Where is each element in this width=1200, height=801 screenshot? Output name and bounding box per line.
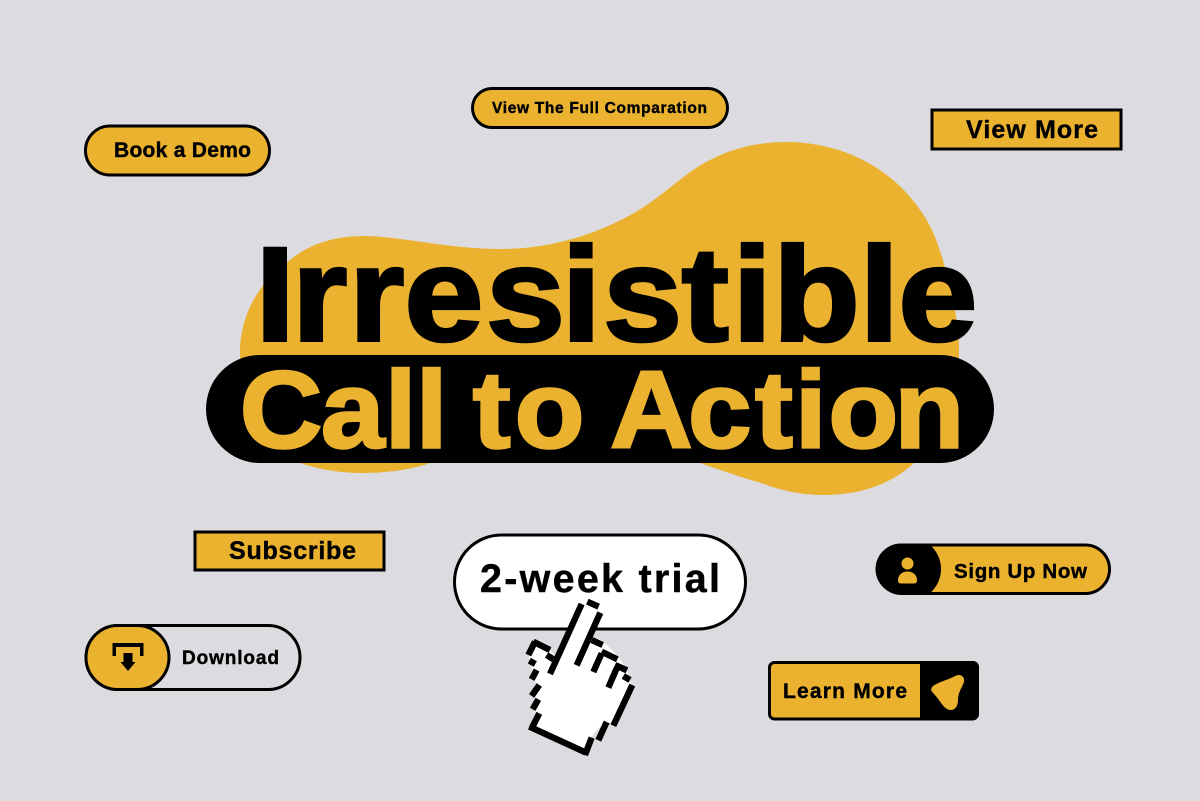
button: 2-week trial: 2-week trial [480,557,720,601]
button: View The Full Comparation [472,88,728,128]
black icon box [920,661,979,720]
icon: person [898,558,917,584]
button: Book a Demo: Book a Demo [114,139,251,162]
button: Subscribe: Subscribe [229,537,356,565]
black pill banner [206,355,994,463]
heading: Call to Action: Call to Action [240,348,964,471]
black cap [876,544,941,594]
button: Book a Demo [86,126,270,175]
heading: Irresistible: Irresistible [255,220,977,370]
button: Download [86,626,300,690]
button: Sign Up Now [876,544,1110,594]
button: Learn More: Learn More [783,680,907,703]
button: View More: View More [966,116,1098,144]
button: View The Full Comparation: View The Full Comparation [492,100,707,117]
icon: download arrow [112,643,144,671]
button: View More [932,110,1121,149]
icon: pixel hand cursor [528,602,632,755]
button: Download: Download [182,648,279,669]
button: 2-week trial [454,535,746,629]
button: Learn More [770,661,979,720]
icon: rounded triangle [931,675,964,710]
button: Sign Up Now: Sign Up Now [954,560,1087,583]
button: Subscribe [195,532,384,570]
yellow cap [86,626,169,690]
yellow background blob [240,142,959,495]
